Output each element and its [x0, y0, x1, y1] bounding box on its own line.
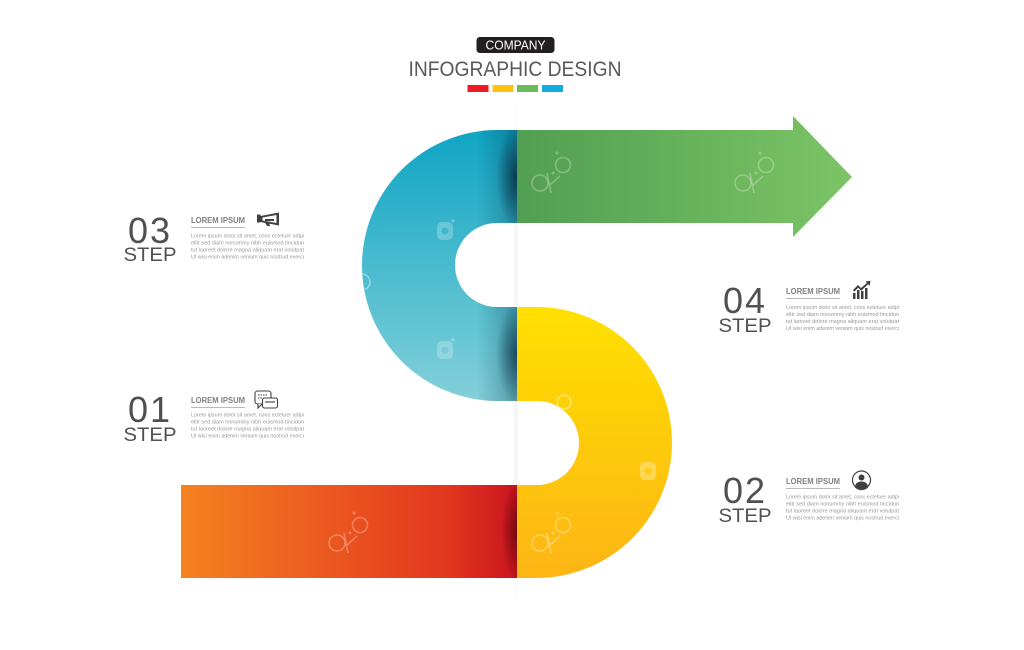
watermark — [557, 395, 571, 409]
segment 04: green arrow — [517, 116, 852, 237]
step 02 text block — [718, 470, 900, 527]
watermark — [437, 338, 454, 359]
body text: Lorem ipsum dolor sit amet, cons ectetuer adipi — [786, 305, 899, 311]
company badge — [476, 37, 554, 53]
watermark — [329, 512, 368, 553]
body text: Lorem ipsum dolor sit amet, cons ectetuer adipi — [191, 412, 304, 418]
body text: Lorem ipsum dolor sit amet, cons ectetuer adipi — [786, 494, 899, 500]
centre fold line — [514, 105, 518, 605]
S-shaped arrow diagram — [181, 105, 852, 605]
body text: tut laoreet dolore magna aliquam erat volutpat — [191, 426, 305, 432]
step label: STEP — [124, 424, 176, 446]
watermark — [735, 152, 774, 193]
body text — [191, 234, 305, 260]
body text — [786, 494, 900, 522]
body text: Ut wisi enim adenim veniam quis nostrud exerci — [786, 326, 899, 332]
body text: tut laoreet dolore magna aliquam erat volutpat — [191, 248, 305, 254]
icon: megaphone — [257, 212, 279, 226]
segment 02: yellow curve — [517, 307, 672, 578]
step number: 03 — [128, 210, 170, 251]
title: INFOGRAPHIC DESIGN — [408, 58, 622, 81]
step number: 01 — [128, 389, 170, 430]
watermark — [532, 512, 570, 553]
step label: STEP — [718, 315, 772, 337]
heading: LOREM IPSUM — [191, 396, 245, 405]
colour key swatches — [468, 85, 563, 92]
icon: business person — [852, 471, 870, 490]
company badge: COMPANY — [486, 38, 546, 52]
segment 01: red bar — [181, 485, 517, 578]
step 01 text block — [124, 389, 305, 446]
step label: STEP — [124, 244, 176, 266]
body text: elitr sed diam nonummy nibh euismod tincidun — [191, 420, 304, 426]
heading: LOREM IPSUM — [786, 477, 840, 486]
body text — [786, 305, 900, 332]
icon: rising bar chart — [853, 281, 870, 299]
watermark — [640, 462, 656, 480]
watermark — [437, 220, 454, 240]
watermark — [362, 274, 370, 290]
body text: Lorem ipsum dolor sit amet, cons ectetuer adipi — [191, 234, 304, 240]
watermark — [532, 152, 570, 193]
body text: Ut wisi enim adenim veniam quis nostrud exerci — [191, 434, 304, 440]
body text: elitr sed diam nonummy nibh euismod tincidun — [191, 240, 304, 246]
body text: tut laoreet dolore magna aliquam erat volutpat — [786, 319, 900, 325]
body text: Ut wisi enim adenim veniam quis nostrud exerci — [786, 516, 899, 522]
body text — [191, 412, 305, 440]
heading: LOREM IPSUM — [191, 216, 245, 225]
body text: Ut wisi enim adenim veniam quis nostrud exerci — [191, 254, 304, 260]
heading: LOREM IPSUM — [786, 287, 840, 296]
icon: chat bubbles — [255, 391, 278, 408]
body text: tut laoreet dolore magna aliquam erat volutpat — [786, 508, 900, 514]
body text: elitr sed diam nonummy nibh euismod tincidun — [786, 502, 899, 508]
step 04 text block — [718, 280, 900, 337]
step number: 04 — [723, 280, 765, 321]
step 03 text block — [124, 210, 305, 266]
step label: STEP — [718, 505, 772, 527]
segment 03: blue curve — [362, 130, 517, 401]
step number: 02 — [723, 470, 765, 511]
body text: elitr sed diam nonummy nibh euismod tincidun — [786, 312, 899, 318]
